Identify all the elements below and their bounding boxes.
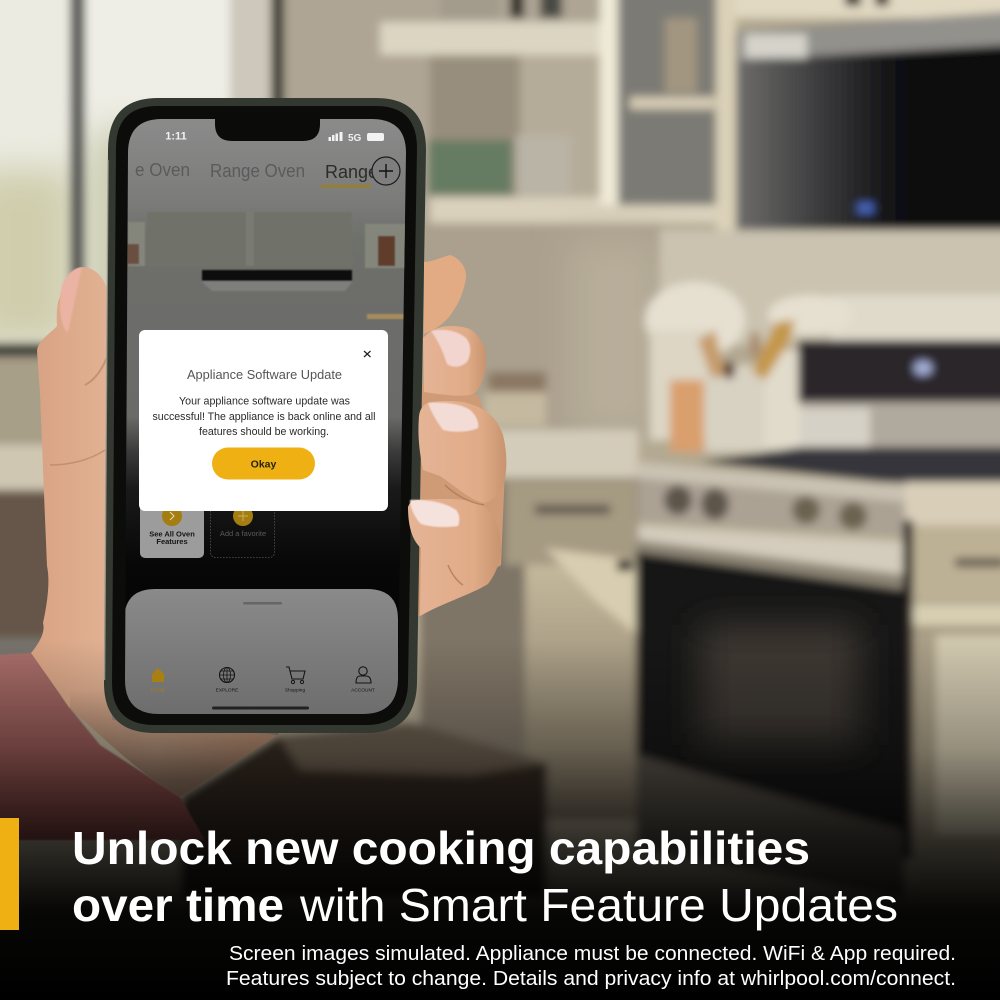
headline: Unlock new cooking capabilities (72, 822, 810, 874)
dialog message: Your appliance software update was (179, 396, 351, 408)
home indicator (212, 706, 309, 710)
close icon (364, 351, 370, 357)
bottom sheet (124, 589, 398, 716)
cooktop (700, 447, 1000, 490)
nav: explore: EXPLORE (216, 688, 238, 694)
window panes (0, 0, 284, 698)
tab labels (136, 163, 374, 188)
nav: home: HOME (151, 688, 165, 692)
upper wall tile, shelves and cabinet (284, 0, 1000, 230)
phone (104, 98, 426, 733)
status bar icons: 5G (348, 133, 362, 144)
card: see all oven features: See All Oven (149, 530, 195, 538)
lower hand shading (70, 690, 280, 797)
finger 2 (423, 326, 486, 396)
finger 4 (408, 499, 501, 616)
bottom darkening gradient (0, 640, 1000, 1000)
nav: shopping: Shopping (285, 688, 305, 694)
skin fold (50, 450, 105, 465)
thumb and palm (31, 267, 278, 797)
backsplash and wall (420, 223, 1000, 440)
back of hand behind fingers (410, 380, 505, 620)
phone bezel (112, 106, 417, 725)
add button (372, 157, 400, 185)
table in front (180, 722, 547, 900)
card: add a favorite: Add a favorite (220, 529, 266, 538)
utensil crock and peach salt mills (670, 320, 800, 452)
app kitchen photo (127, 212, 407, 319)
countertop left of range (420, 430, 638, 478)
canisters on counter (484, 372, 546, 426)
headline: over time (72, 879, 284, 931)
sleeve (0, 653, 205, 840)
dialog message: features should be working. (199, 426, 329, 438)
phone screen (120, 119, 410, 719)
phone left rim highlight (104, 160, 108, 680)
disclaimer (226, 943, 956, 990)
tab labels: Range Oven (210, 161, 305, 181)
status bar icons (328, 132, 384, 144)
tab labels: e Oven (135, 160, 190, 180)
disclaimer: Screen images simulated. Appliance must be connected. WiFi & App required. (229, 943, 956, 965)
card: see all oven features (140, 508, 204, 558)
notch (215, 112, 320, 141)
oven window glow (700, 625, 860, 745)
phone body (104, 98, 426, 733)
disclaimer: Features subject to change. Details and privacy info at whirlpool.com/connect. (226, 968, 956, 990)
card: see all oven features: Features (156, 537, 188, 546)
lower cabinets left (420, 478, 638, 820)
dialog message: successful! The appliance is back online and all (152, 411, 376, 423)
dialog message (152, 396, 376, 438)
range backguard (798, 340, 1000, 462)
fingers on right of phone (408, 255, 506, 616)
headline (72, 822, 898, 931)
crease shading (445, 485, 484, 585)
yellow accent bar (0, 818, 19, 930)
nav: home (151, 668, 165, 692)
range hood (202, 280, 352, 291)
card: add a favorite (210, 511, 275, 558)
okay button: Okay (251, 458, 277, 470)
lower cabinets right (903, 482, 1000, 905)
dialog title: Appliance Software Update (187, 367, 342, 382)
skin shadow at thumb base (85, 355, 108, 385)
status bar time: 1:11 (165, 130, 187, 142)
tab labels: Range (325, 162, 378, 182)
oven door (636, 552, 905, 832)
microwave (736, 8, 1000, 230)
dialog: appliance software update (139, 330, 388, 511)
nail 3 (428, 403, 478, 432)
finger 3 (418, 401, 506, 503)
finger 1 (424, 255, 466, 334)
nav: account: ACCOUNT (351, 688, 375, 694)
nav: explore (216, 668, 238, 694)
headline: with Smart Feature Updates (299, 879, 898, 931)
thumb nail (60, 268, 82, 332)
nail 2 (431, 330, 470, 367)
nav: account (351, 667, 375, 694)
hand holding the phone (0, 267, 505, 840)
nail 4 (410, 500, 459, 527)
control panel with knobs (638, 478, 905, 590)
nav: shopping (285, 667, 305, 694)
okay button (212, 448, 315, 480)
